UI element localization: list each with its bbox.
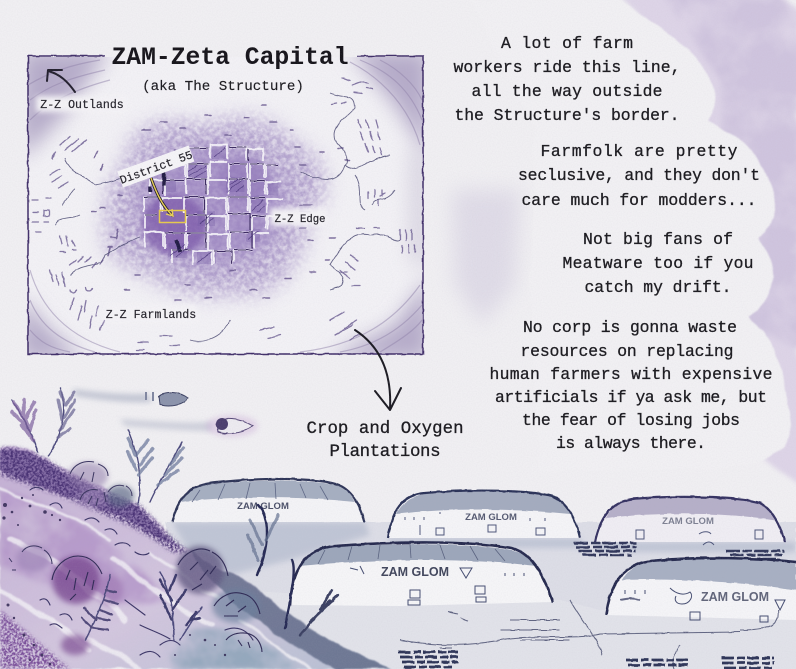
bush: slate xyxy=(212,589,260,623)
ground scribbles: back xyxy=(574,543,784,559)
bush: next to plum xyxy=(97,574,123,606)
purple wash mid hill xyxy=(0,490,170,604)
plant: herringbone xyxy=(82,575,118,640)
map frame xyxy=(28,56,423,354)
bush: left slope xyxy=(9,544,52,572)
plant: slope dark xyxy=(160,572,202,640)
plantation ground: back xyxy=(165,522,796,669)
dome: back left xyxy=(172,479,365,522)
ground scribbles: front xyxy=(398,652,774,668)
lilac watercolour wash xyxy=(622,0,796,480)
caption: crop and oxygen plantations: Crop and Oxygen xyxy=(306,420,464,439)
vehicle: upper hover craft xyxy=(72,389,188,406)
text block: meatware: Meatware too if you xyxy=(562,254,754,273)
soft purple district wash xyxy=(102,117,326,297)
plant: tall in front of dome xyxy=(248,505,338,635)
panel: city map xyxy=(20,50,430,360)
dome: back middle: ZAM GLOM xyxy=(465,512,517,523)
label: Z-Z Edge: Z-Z Edge xyxy=(275,214,325,226)
label: Z-Z Outlands: Z-Z Outlands xyxy=(40,99,124,112)
text block: meatware xyxy=(562,230,754,297)
icon: district 55 highlight box and arrow xyxy=(151,178,186,222)
text block: farm workers: all the way outside xyxy=(472,82,662,101)
text block: no corp: artificials if ya ask me, but xyxy=(495,388,767,407)
ground texture: front fields xyxy=(400,598,778,669)
map base with shaded corners xyxy=(20,50,430,360)
bush: dark plum xyxy=(52,556,102,604)
text block: farmfolk: seclusive, and they don't xyxy=(518,166,760,185)
hill body xyxy=(0,447,392,669)
text block: no corp: No corp is gonna waste xyxy=(523,318,737,337)
text block: no corp: resources on replacing xyxy=(520,342,734,361)
dome: back middle xyxy=(388,491,580,538)
district blocks xyxy=(144,145,283,265)
white brush streaks xyxy=(0,490,310,669)
dry-brush purple texture xyxy=(107,119,323,294)
ground shade band xyxy=(172,522,796,575)
ink speckles xyxy=(2,494,226,665)
text block: no corp xyxy=(490,318,772,453)
road network xyxy=(55,93,400,341)
text block: meatware: catch my drift. xyxy=(584,278,732,297)
dome: back left: ZAM GLOM xyxy=(237,501,289,512)
lower washes xyxy=(0,610,70,669)
bush: foot xyxy=(226,633,262,652)
text block: farm workers: workers ride this line, xyxy=(454,58,680,77)
dome: front middle: ZAM GLOM xyxy=(381,565,449,579)
label: Z-Z Farmlands: Z-Z Farmlands xyxy=(106,309,196,322)
bush: ridge right xyxy=(106,485,134,507)
text block: no corp: the fear of losing jobs xyxy=(522,411,740,430)
bush: ridge centre xyxy=(77,487,107,509)
slate ridge lower xyxy=(190,552,392,669)
title: ZAM-Zeta Capital xyxy=(111,44,349,72)
text block: no corp: human farmers with expensive xyxy=(490,365,772,384)
white speech cloud xyxy=(470,0,790,470)
caption: crop and oxygen plantations: Plantations xyxy=(330,443,440,462)
plant: centre pair xyxy=(128,430,183,505)
subtitle: (aka The Structure) xyxy=(142,79,304,95)
text block: no corp: is always there. xyxy=(556,434,706,453)
bush: slope middle xyxy=(176,546,228,594)
plantation ground: front xyxy=(240,590,796,669)
dome: front middle xyxy=(290,542,553,606)
label: District 55: District 55 xyxy=(118,149,195,188)
bush: top ridge xyxy=(68,462,108,490)
text block: farmfolk: Farmfolk are pretty xyxy=(540,142,738,161)
caption: crop and oxygen plantations xyxy=(306,420,464,462)
central purple core xyxy=(140,147,284,263)
arrow: map to plantations xyxy=(355,330,401,410)
vehicle: lower hover craft xyxy=(120,415,258,437)
plant: top-left tall xyxy=(48,388,75,456)
plant: top-left feathered xyxy=(12,400,38,452)
hill xyxy=(0,447,392,669)
dome: front right xyxy=(606,558,796,622)
farm plots xyxy=(32,78,415,350)
text block: farmfolk xyxy=(518,142,760,210)
text block: farm workers xyxy=(454,34,680,125)
bush: lower plum xyxy=(61,635,89,655)
dark ridge xyxy=(0,448,190,553)
label backings xyxy=(36,96,328,322)
plants xyxy=(12,388,338,640)
text block: meatware: Not big fans of xyxy=(583,230,733,249)
text block: farmfolk: care much for modders... xyxy=(522,191,756,210)
ridge underlay xyxy=(0,450,180,548)
text block: farm workers: A lot of farm xyxy=(501,34,633,53)
arrow: to outlands xyxy=(47,70,75,92)
dome: front right: ZAM GLOM xyxy=(701,590,769,604)
hill scribbles xyxy=(30,487,253,657)
text block: farm workers: the Structure's border. xyxy=(454,106,680,125)
specks and dabs xyxy=(92,105,349,300)
bushes xyxy=(9,462,262,655)
dome: back right xyxy=(595,497,785,545)
dome: back right: ZAM GLOM xyxy=(662,516,714,527)
